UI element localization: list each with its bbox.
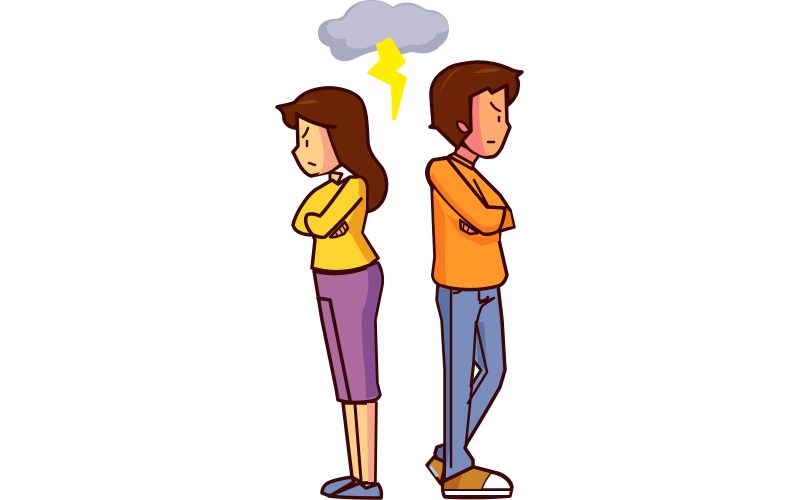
woman fringe line [297, 114, 335, 127]
man collar [449, 153, 474, 169]
woman hair highlight [296, 100, 320, 104]
man folded arm shading [430, 172, 501, 232]
man jeans [437, 285, 505, 481]
woman folded hands [330, 222, 348, 237]
woman leg shadow [367, 403, 375, 482]
man knee gap [471, 361, 481, 386]
man far shoe [427, 456, 446, 484]
woman sweater shadow [345, 178, 376, 263]
woman trousers shadow [362, 264, 381, 399]
man hair [430, 62, 522, 148]
woman folded arm [306, 178, 361, 237]
woman neck [330, 172, 342, 184]
woman leg divider [355, 405, 361, 480]
man sweater crease [474, 180, 488, 206]
man shoe sole [443, 490, 511, 496]
woman finger lines [335, 225, 345, 236]
woman back shoe [322, 477, 354, 496]
figure: man [427, 62, 522, 498]
woman eye and brow [303, 128, 315, 165]
man finger lines [463, 224, 469, 232]
woman face [293, 115, 341, 176]
figure: woman [277, 88, 387, 498]
man far trouser leg [435, 444, 447, 462]
man shoe toe cap [482, 473, 511, 489]
woman hair back [277, 88, 387, 212]
woman trousers [314, 263, 382, 402]
woman legs [343, 403, 376, 483]
woman trousers seam [318, 298, 350, 400]
man hair highlight [439, 68, 502, 97]
woman front shoe [329, 483, 381, 498]
man jeans seams [451, 290, 494, 467]
man sweater shadow [433, 190, 447, 285]
man face shadow [458, 93, 487, 156]
man shoe dark side [445, 473, 462, 489]
man sweater [427, 157, 514, 290]
man hands [460, 220, 478, 234]
man face [457, 86, 510, 157]
woman sweater [293, 177, 378, 272]
man eye, brow and mouth [488, 103, 500, 142]
woman face shadow [317, 125, 339, 175]
icon: storm cloud [318, 0, 449, 61]
man neck [455, 143, 480, 164]
man front shoe [443, 466, 512, 498]
man ear [457, 121, 470, 133]
man jeans shadow [438, 288, 451, 470]
man far shoe sole [429, 465, 439, 477]
man folded arm [428, 158, 505, 234]
icon: lightning bolt [368, 38, 406, 119]
